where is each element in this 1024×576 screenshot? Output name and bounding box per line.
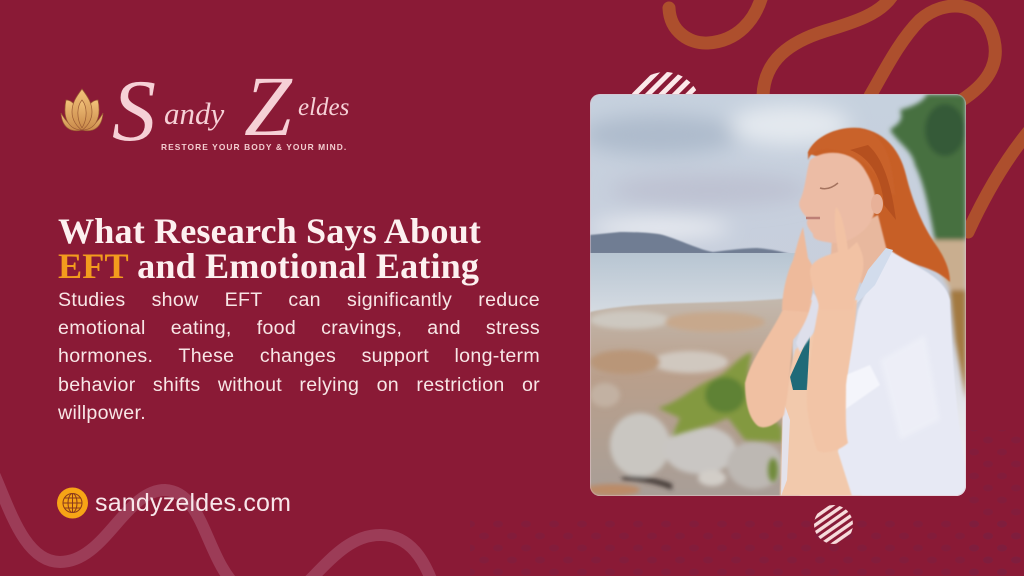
face: [799, 153, 876, 243]
logo wordmark: andy: [164, 96, 224, 131]
heading: EFT and Emotional Eating: [58, 246, 479, 286]
mountains: [590, 232, 790, 254]
hair back: [808, 128, 950, 282]
shirt: [838, 250, 966, 496]
body text: Studies show EFT can significantly reduce: [58, 289, 540, 311]
hands: [782, 227, 815, 312]
neck: [830, 215, 888, 285]
heading: What Research Says About: [58, 211, 481, 251]
body text: behavior shifts without relying on restriction or: [58, 374, 540, 396]
hair front: [807, 128, 866, 160]
heading: [58, 211, 481, 286]
tree: [890, 94, 966, 400]
left arm: [745, 300, 812, 427]
logo wordmark: S: [112, 63, 156, 160]
ear: [871, 194, 883, 214]
body text: [58, 289, 540, 424]
body text: willpower.: [58, 402, 146, 424]
logo wordmark: eldes: [298, 94, 349, 121]
logo tagline: RESTORE YOUR BODY & YOUR MIND.: [161, 142, 347, 152]
website url: sandyzeldes.com: [95, 489, 291, 517]
bikini: [790, 333, 810, 390]
body text: hormones. These changes support long-term: [58, 345, 540, 367]
logo wordmark: Z: [244, 58, 293, 154]
bush: [658, 352, 782, 482]
icon: lotus: [61, 89, 103, 131]
torso: [779, 332, 862, 496]
right arm: [807, 300, 857, 452]
body text: emotional eating, food cravings, and stress: [58, 317, 540, 339]
photo: woman tapping her face by the sea: [590, 94, 966, 496]
rocks: [590, 298, 800, 496]
